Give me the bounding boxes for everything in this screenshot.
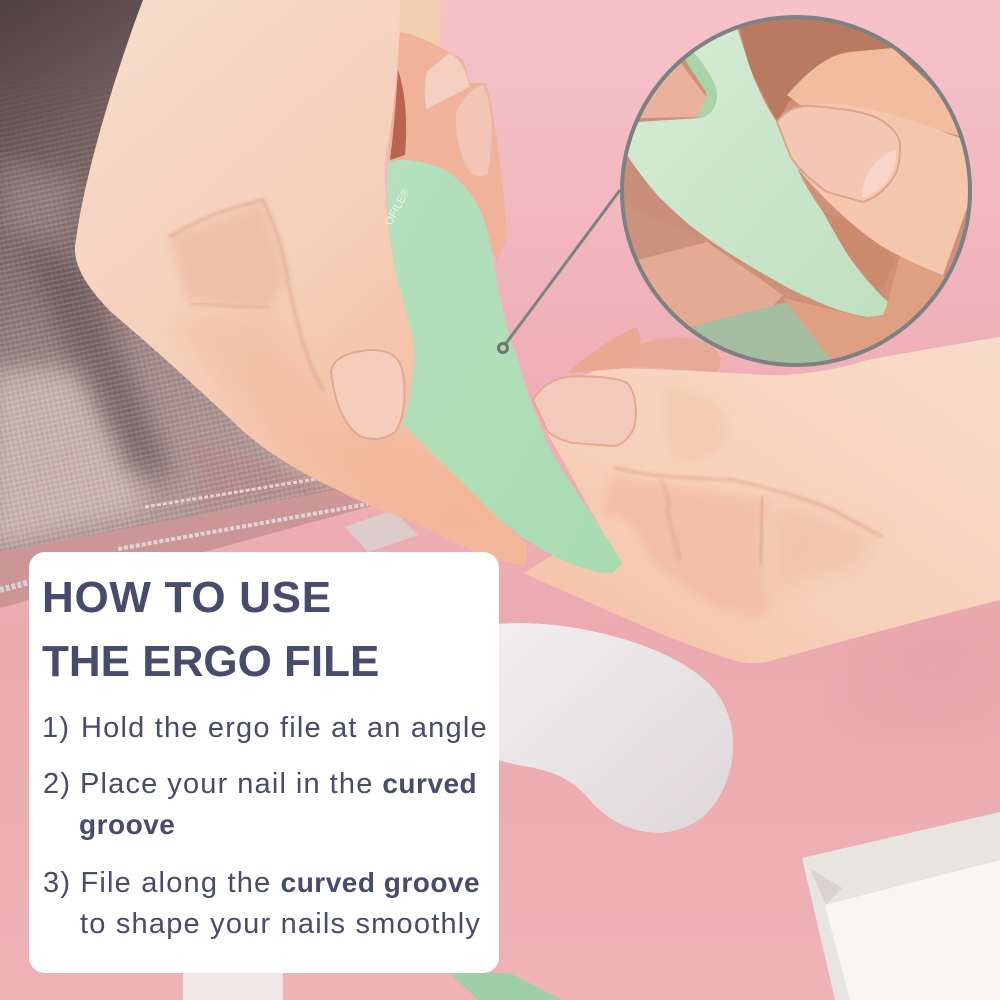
white teardrop pad	[498, 623, 733, 833]
right thumb nail	[533, 376, 636, 446]
heading line 1: HOW TO USE	[42, 573, 332, 622]
right hand fingertips	[568, 327, 720, 373]
darker pink shading	[840, 590, 1000, 730]
inset green file	[627, 28, 888, 317]
step 2: 2) Place your nail in the curved	[43, 768, 477, 800]
magnified inset circle	[615, 10, 977, 372]
inset left nail	[640, 62, 707, 118]
right thumb knuckle	[664, 385, 729, 462]
left hand	[75, 0, 527, 565]
rear fingernails	[425, 53, 492, 176]
pale strip behind hand	[400, 0, 441, 55]
step 1: Hold the ergo file at an angle	[81, 712, 488, 744]
left thumb nail	[331, 350, 405, 439]
step 2: groove	[79, 809, 175, 840]
rear finger	[388, 32, 507, 261]
pointer line	[504, 190, 620, 346]
step 3	[43, 867, 481, 940]
inset lower fingers	[620, 205, 703, 262]
pointer dot	[498, 344, 508, 352]
file logo: OFILE®	[383, 187, 412, 227]
step 2	[43, 768, 477, 840]
gap shadow between fingers	[390, 70, 406, 160]
left hand shading	[169, 200, 510, 550]
white box	[802, 812, 1000, 1000]
inset dark upper fingers	[740, 19, 944, 121]
green ergo file	[387, 160, 622, 573]
heading line 2: THE ERGO FILE	[42, 637, 379, 686]
inset green shadow	[690, 302, 831, 363]
small items at bottom	[183, 973, 562, 1000]
inset right lower finger	[784, 256, 944, 360]
metallic bag	[0, 0, 418, 608]
inset thumb	[796, 104, 968, 275]
inset thumb nail	[777, 106, 900, 202]
step 3: 3) File along the curved groove	[43, 867, 480, 899]
step 3: to shape your nails smoothly	[80, 908, 481, 940]
inset file dark edge	[685, 52, 717, 118]
right palm folds	[603, 467, 883, 616]
right hand	[523, 337, 1000, 663]
step 1: 1)	[42, 712, 70, 744]
instruction card	[29, 552, 499, 973]
